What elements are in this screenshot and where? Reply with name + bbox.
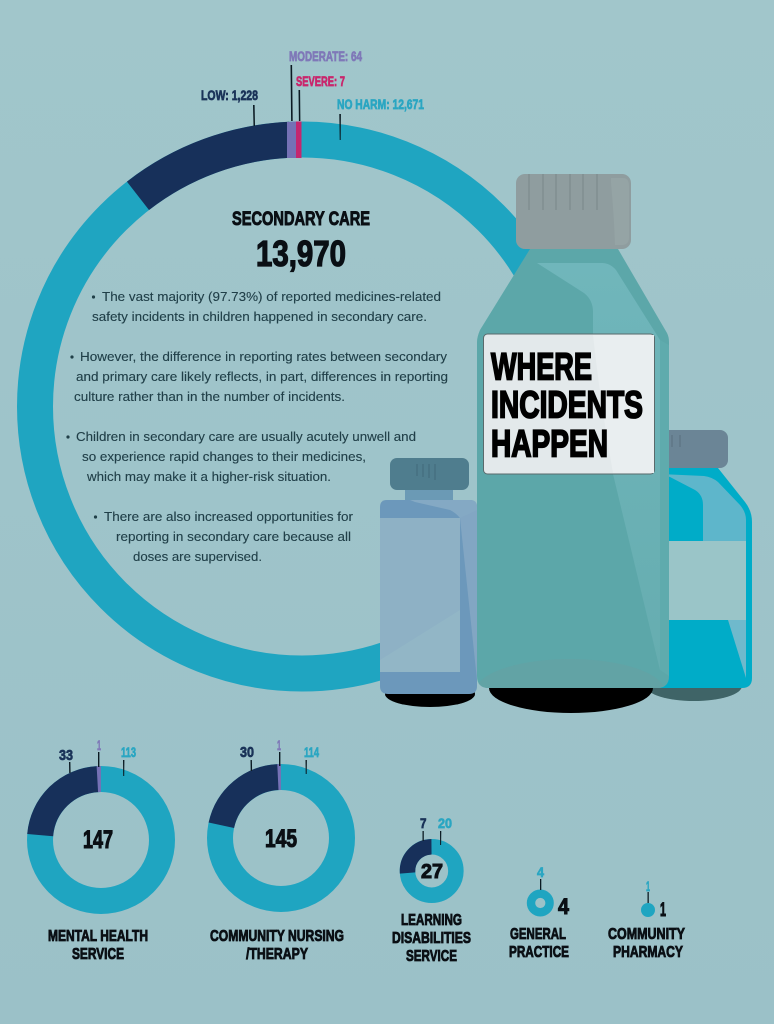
donut labels: severity counts: LOW: 1,228 bbox=[201, 87, 258, 103]
donut chart: community nursing / therapy: 1 bbox=[277, 737, 281, 753]
text block: secondary care notes: There are also increased opportunities for bbox=[104, 509, 354, 524]
donut chart: mental health service: SERVICE bbox=[72, 946, 124, 963]
donut chart: learning disabilities service bbox=[392, 815, 471, 965]
donut chart: community nursing / therapy: 30 bbox=[240, 744, 254, 761]
text block: secondary care notes: doses are supervised. bbox=[133, 549, 262, 564]
donut chart: general practice: GENERAL bbox=[510, 926, 566, 943]
donut chart: community pharmacy bbox=[608, 878, 685, 961]
donut chart: learning disabilities service: LEARNING bbox=[401, 912, 462, 929]
bottle cap bbox=[516, 174, 631, 249]
label: where incidents happen: INCIDENTS bbox=[491, 384, 643, 426]
icon: large medicine bottle bbox=[475, 174, 669, 725]
donut chart: community nursing / therapy: 114 bbox=[304, 744, 319, 760]
label: where incidents happen: WHERE bbox=[491, 346, 592, 388]
donut chart: learning disabilities service: SERVICE bbox=[406, 948, 457, 965]
donut chart: mental health service: 1 bbox=[97, 737, 101, 753]
text block: secondary care notes: safety incidents in children happened in secondary care. bbox=[92, 309, 427, 324]
donut labels: severity counts bbox=[201, 48, 424, 140]
main donut chart: secondary care bbox=[0, 32, 677, 781]
text block: secondary care notes bbox=[66, 289, 448, 564]
donut chart: mental health service: 33 bbox=[59, 747, 73, 764]
label: where incidents happen: HAPPEN bbox=[491, 424, 608, 466]
donut chart: community pharmacy: PHARMACY bbox=[613, 944, 683, 961]
text block: secondary care notes: The vast majority (97.73%) of reported medicines-related bbox=[102, 289, 441, 304]
donut chart: learning disabilities service: 7 bbox=[420, 815, 427, 831]
heading: secondary care total: SECONDARY CARE bbox=[232, 209, 370, 230]
donut chart: community nursing / therapy bbox=[208, 737, 354, 963]
donut chart: mental health service: 113 bbox=[121, 744, 136, 760]
donut chart: general practice: PRACTICE bbox=[509, 944, 569, 961]
text block: secondary care notes: so experience rapid changes to their medicines, bbox=[82, 449, 366, 464]
donut chart: learning disabilities service: 27 bbox=[421, 861, 443, 883]
donut labels: severity counts: MODERATE: 64 bbox=[289, 48, 362, 64]
donut chart: community pharmacy: COMMUNITY bbox=[608, 926, 685, 943]
donut chart: learning disabilities service: DISABILITIES bbox=[392, 930, 471, 947]
text block: secondary care notes: However, the difference in reporting rates between secondary bbox=[80, 349, 447, 364]
donut chart: community nursing / therapy: COMMUNITY NURSING bbox=[210, 928, 344, 945]
donut chart: general practice: 4 bbox=[558, 894, 570, 919]
donut labels: severity counts: NO HARM: 12,671 bbox=[337, 96, 424, 112]
donut labels: severity counts: SEVERE: 7 bbox=[296, 73, 345, 89]
text block: secondary care notes: culture rather than in the number of incidents. bbox=[74, 389, 345, 404]
heading: secondary care total bbox=[232, 209, 370, 274]
donut chart: general practice bbox=[509, 864, 570, 961]
donut chart: mental health service: MENTAL HEALTH bbox=[48, 928, 148, 945]
text block: secondary care notes: reporting in secondary care because all bbox=[116, 529, 351, 544]
text block: secondary care notes: and primary care likely reflects, in part, differences in reporting bbox=[76, 369, 448, 384]
donut chart: mental health service bbox=[35, 737, 167, 963]
icon: right medicine bottle bbox=[640, 430, 752, 701]
donut chart: community pharmacy: 1 bbox=[660, 900, 666, 921]
donut chart: general practice: 4 bbox=[537, 864, 544, 880]
donut chart: community pharmacy: 1 bbox=[646, 878, 650, 894]
donut chart: community nursing / therapy: 145 bbox=[265, 825, 297, 853]
text block: secondary care notes: which may make it a higher-risk situation. bbox=[86, 469, 331, 484]
icon: small vial bbox=[380, 458, 477, 707]
donut chart: community nursing / therapy: /THERAPY bbox=[246, 946, 308, 963]
donut chart: learning disabilities service: 20 bbox=[438, 815, 452, 831]
text block: secondary care notes: Children in secondary care are usually acutely unwell and bbox=[76, 429, 416, 444]
heading: secondary care total: 13,970 bbox=[256, 233, 346, 274]
donut chart: mental health service: 147 bbox=[83, 826, 113, 854]
label: where incidents happen bbox=[484, 334, 654, 474]
